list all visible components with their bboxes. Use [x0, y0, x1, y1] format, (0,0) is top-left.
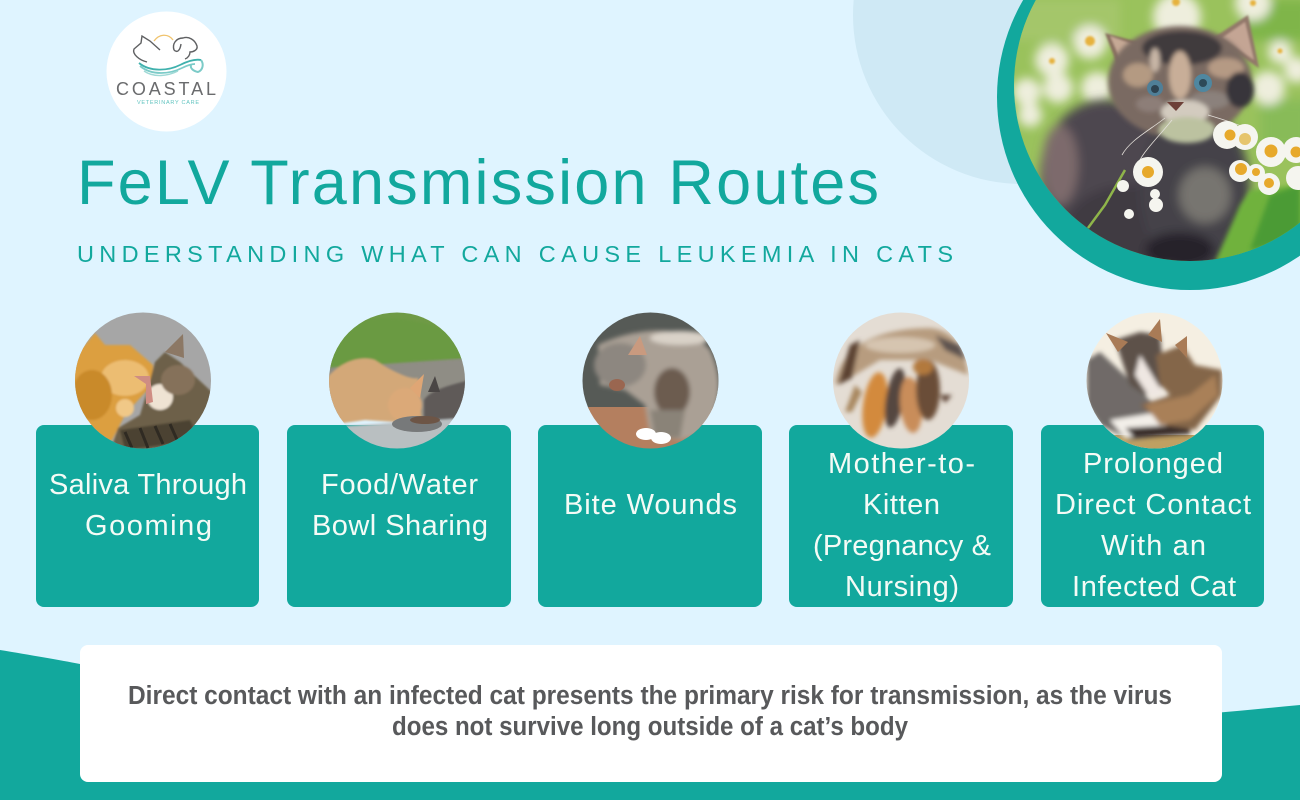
- card background: [287, 425, 511, 607]
- photo: nursing kittens: [830, 310, 972, 452]
- icon: cat outline: [134, 36, 160, 62]
- title: FeLV Transmission Routes: [77, 148, 879, 218]
- card text: [312, 469, 488, 542]
- icon: dog outline: [173, 37, 197, 59]
- grass: [1213, 184, 1300, 259]
- bottom teal wave: [0, 650, 1300, 800]
- card text: (Pregnancy &: [813, 530, 991, 562]
- kitten ears: [1104, 14, 1260, 68]
- kitten body: [1040, 100, 1250, 275]
- callout: [80, 645, 1222, 782]
- logo: [106, 12, 226, 132]
- card background: [36, 425, 259, 607]
- card text: Direct Contact: [1055, 489, 1251, 521]
- card text: [49, 469, 247, 542]
- card text: [1055, 448, 1251, 603]
- kitten head: [1108, 26, 1254, 143]
- photo: cats sharing a bowl: [325, 310, 470, 450]
- card text: Bowl Sharing: [312, 510, 488, 542]
- callout text: Direct contact with an infected cat presents the primary risk for transmission, as the virus: [128, 682, 1172, 710]
- card text: Infected Cat: [1072, 571, 1236, 603]
- photo: cuddling cats: [1085, 310, 1225, 452]
- card text: Kitten: [863, 489, 940, 521]
- foreground daisies: [1117, 121, 1300, 219]
- card background: [538, 425, 762, 607]
- kitten eyes and nose: [1147, 80, 1163, 96]
- logo wordmark: COASTAL: [116, 79, 216, 99]
- callout text: [128, 682, 1172, 741]
- card text: Gooming: [85, 510, 212, 542]
- card text: Nursing): [845, 571, 959, 603]
- teal ring: [997, 0, 1300, 290]
- card text: Prolonged: [1083, 448, 1223, 480]
- blurred daisies: [1013, 0, 1300, 127]
- card background: [1041, 425, 1264, 607]
- subtitle: UNDERSTANDING WHAT CAN CAUSE LEUKEMIA IN CATS: [77, 241, 953, 267]
- callout text: does not survive long outside of a cat’s body: [392, 713, 909, 741]
- card background: [789, 425, 1013, 607]
- card text: Food/Water: [321, 469, 478, 501]
- card text: Bite Wounds: [564, 489, 737, 521]
- panel: food and water bowl sharing: [287, 310, 511, 607]
- card text: [813, 448, 991, 603]
- hero kitten photo with teal ring: [997, 0, 1300, 290]
- icon: waves: [139, 60, 203, 76]
- card text: Saliva Through: [49, 469, 247, 501]
- whiskers: [1122, 115, 1250, 160]
- decorative pale circle: [853, 0, 1191, 184]
- photo: hissing cat: [580, 310, 722, 452]
- logo tagline: VETERINARY CARE: [137, 100, 199, 106]
- icon: sun arc: [154, 35, 173, 41]
- card text: With an: [1101, 530, 1206, 562]
- panel: mother to kitten: [789, 310, 1013, 607]
- card text: Mother-to-: [828, 448, 975, 480]
- panel: bite wounds: [538, 310, 762, 607]
- panel: prolonged direct contact: [1041, 310, 1264, 607]
- photo: kitten in daisies: [1014, 0, 1300, 261]
- panel: saliva through grooming: [36, 310, 259, 607]
- photo: cats grooming: [75, 312, 211, 448]
